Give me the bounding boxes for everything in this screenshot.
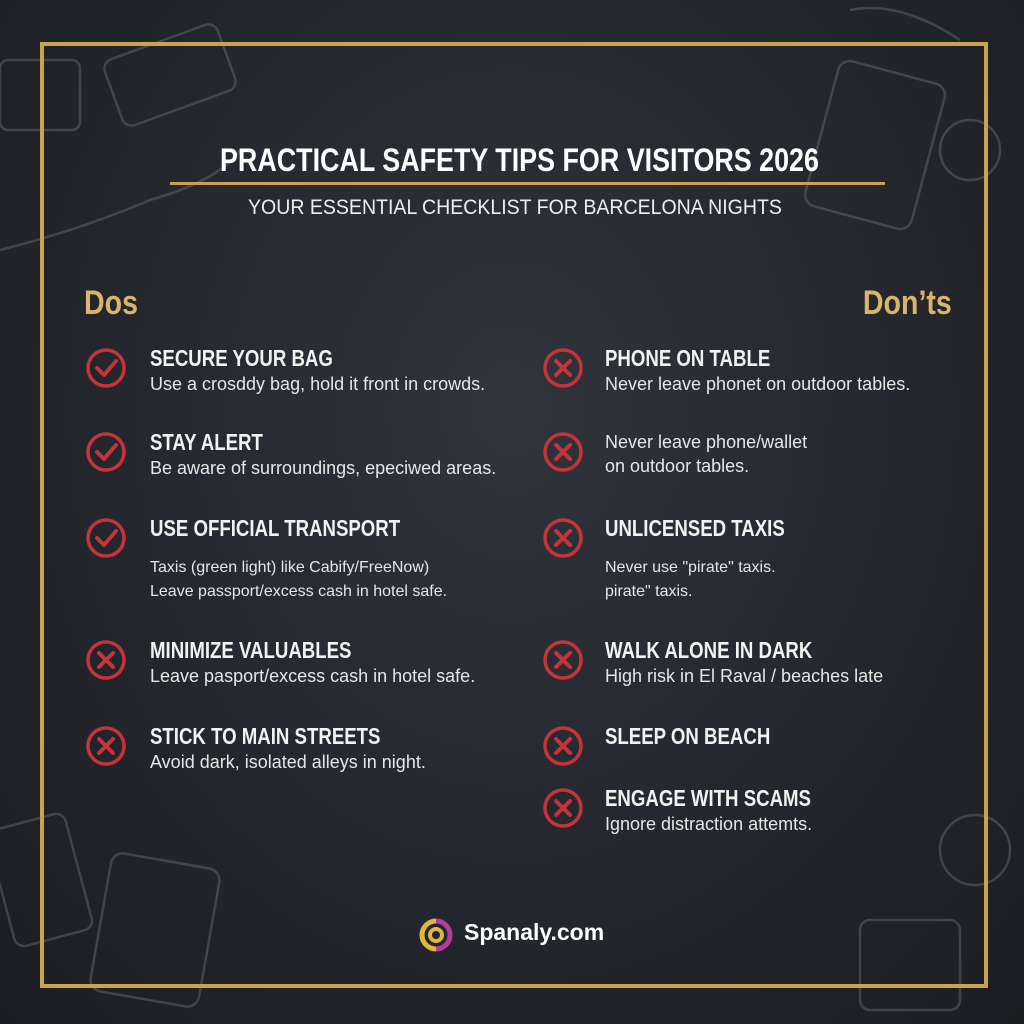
item: main streets: STICK TO MAIN STREETS	[150, 723, 380, 749]
item: scams: Ignore distraction attemts.	[605, 814, 812, 834]
item: walk alone	[543, 637, 883, 686]
item: main streets: Avoid dark, isolated alleys in night.	[150, 752, 426, 772]
heading: Dos: Dos	[84, 284, 138, 322]
panel: don'ts list	[543, 345, 910, 834]
item: unlicensed taxis: UNLICENSED TAXIS	[605, 515, 785, 541]
item: secure your bag	[86, 345, 485, 394]
panel: dos list	[86, 345, 496, 772]
item: sleep on beach	[543, 723, 770, 766]
item: phone/wallet: on outdoor tables.	[605, 456, 749, 476]
item: official transport	[86, 515, 447, 600]
subtitle: YOUR ESSENTIAL CHECKLIST FOR BARCELONA NIGHTS	[248, 196, 782, 219]
heading: Don'ts: Don’ts	[863, 284, 952, 322]
item: sleep on beach: SLEEP ON BEACH	[605, 723, 770, 749]
item: official transport: Leave passport/excess cash in hotel safe.	[150, 583, 447, 600]
item: walk alone: High risk in El Raval / beaches late	[605, 666, 883, 686]
item: secure your bag: Use a crosddy bag, hold it front in crowds.	[150, 374, 485, 394]
item: phone/wallet	[543, 432, 807, 476]
title underline	[170, 182, 885, 185]
item: stay alert	[86, 429, 496, 478]
item: minimize valuables	[86, 637, 475, 686]
item: minimize valuables: Leave pasport/excess cash in hotel safe.	[150, 666, 475, 686]
item: unlicensed taxis: pirate" taxis.	[605, 583, 692, 600]
logo: Spanaly.com	[420, 918, 604, 952]
item: unlicensed taxis: Never use "pirate" taxis.	[605, 559, 776, 576]
item: stay alert: STAY ALERT	[150, 429, 263, 455]
logo: Spanaly.com: Spanaly.com	[464, 919, 604, 945]
item: stay alert: Be aware of surroundings, epeciwed areas.	[150, 458, 496, 478]
item: scams: ENGAGE WITH SCAMS	[605, 785, 811, 811]
item: scams	[543, 785, 812, 834]
item: main streets	[86, 723, 426, 772]
item: phone on table: PHONE ON TABLE	[605, 345, 770, 371]
item: phone on table	[543, 345, 910, 394]
item: official transport: Taxis (green light) like Cabify/FreeNow)	[150, 559, 429, 576]
icon: logo mark	[420, 918, 452, 952]
item: phone/wallet: Never leave phone/wallet	[605, 432, 807, 452]
item: minimize valuables: MINIMIZE VALUABLES	[150, 637, 351, 663]
item: unlicensed taxis	[543, 515, 785, 600]
item: secure your bag: SECURE YOUR BAG	[150, 345, 333, 371]
title: PRACTICAL SAFETY TIPS FOR VISITORS 2026	[220, 142, 819, 178]
item: official transport: USE OFFICIAL TRANSPORT	[150, 515, 400, 541]
item: phone on table: Never leave phonet on outdoor tables.	[605, 374, 910, 394]
item: walk alone: WALK ALONE IN DARK	[605, 637, 812, 663]
